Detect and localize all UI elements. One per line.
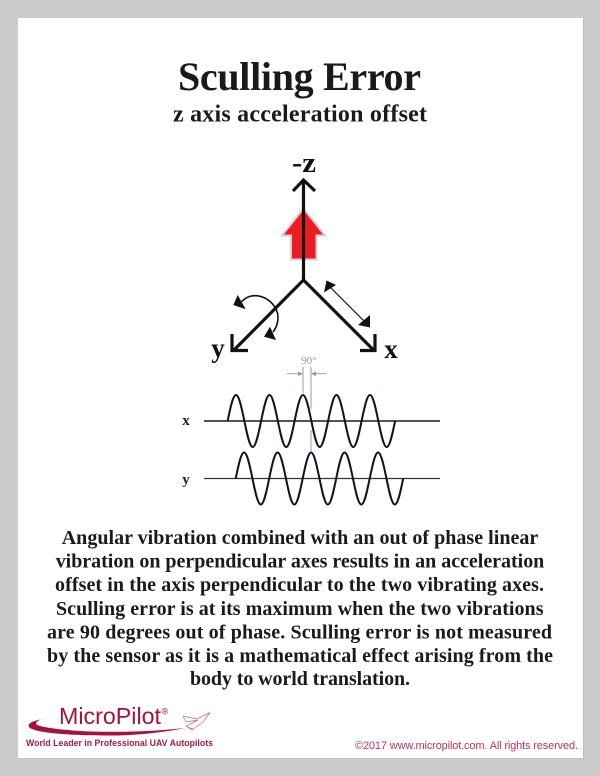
title: Sculling Error — [178, 54, 421, 99]
phase marker: 90 degrees: 90° — [301, 355, 317, 367]
x sine wave — [228, 395, 395, 447]
arrow: z axis — [293, 180, 315, 280]
body text: offset in the axis perpendicular to the two vibrating axes. — [55, 574, 544, 596]
y sine wave — [236, 452, 403, 504]
label: y: y — [211, 333, 225, 363]
body text: Sculling error is at its maximum when the two vibrations — [56, 598, 544, 620]
wave y axis line — [204, 478, 440, 480]
icon: plane outline — [183, 712, 210, 730]
subtitle: z axis acceleration offset — [173, 102, 427, 128]
arrow: y axis — [232, 280, 304, 351]
body text: are 90 degrees out of phase. Sculling error is not measured — [47, 621, 552, 643]
body text — [47, 527, 553, 690]
arrow: linear vibration double arrow — [324, 280, 370, 328]
copyright: ©2017 www.micropilot.com. All rights reserved. — [355, 740, 578, 752]
axis diagram — [211, 148, 398, 364]
logo: MicroPilot — [26, 703, 213, 748]
logo wordmark: MicroPilot — [59, 703, 162, 729]
body text: by the sensor as it is a mathematical effect arising from the — [47, 645, 553, 667]
logo swoosh — [29, 719, 185, 736]
icon: red acceleration arrow — [282, 208, 325, 260]
label: -z: -z — [292, 148, 316, 179]
label: wave x: x — [182, 413, 190, 429]
logo registered mark: ® — [162, 706, 168, 716]
logo tagline: World Leader in Professional UAV Autopilots — [26, 738, 213, 748]
body text: Angular vibration combined with an out of phase linear — [62, 527, 538, 549]
label: x: x — [384, 334, 398, 364]
wave chart — [182, 355, 440, 504]
label: wave y: y — [182, 472, 190, 488]
arrow: angular vibration curved arrow — [233, 295, 278, 340]
wave x axis line — [204, 420, 440, 422]
arrow: x axis — [304, 280, 375, 351]
body text: body to world translation. — [190, 668, 410, 690]
body text: vibration on perpendicular axes results in an acceleration — [56, 551, 544, 573]
phase marker: 90 degrees — [287, 355, 327, 451]
